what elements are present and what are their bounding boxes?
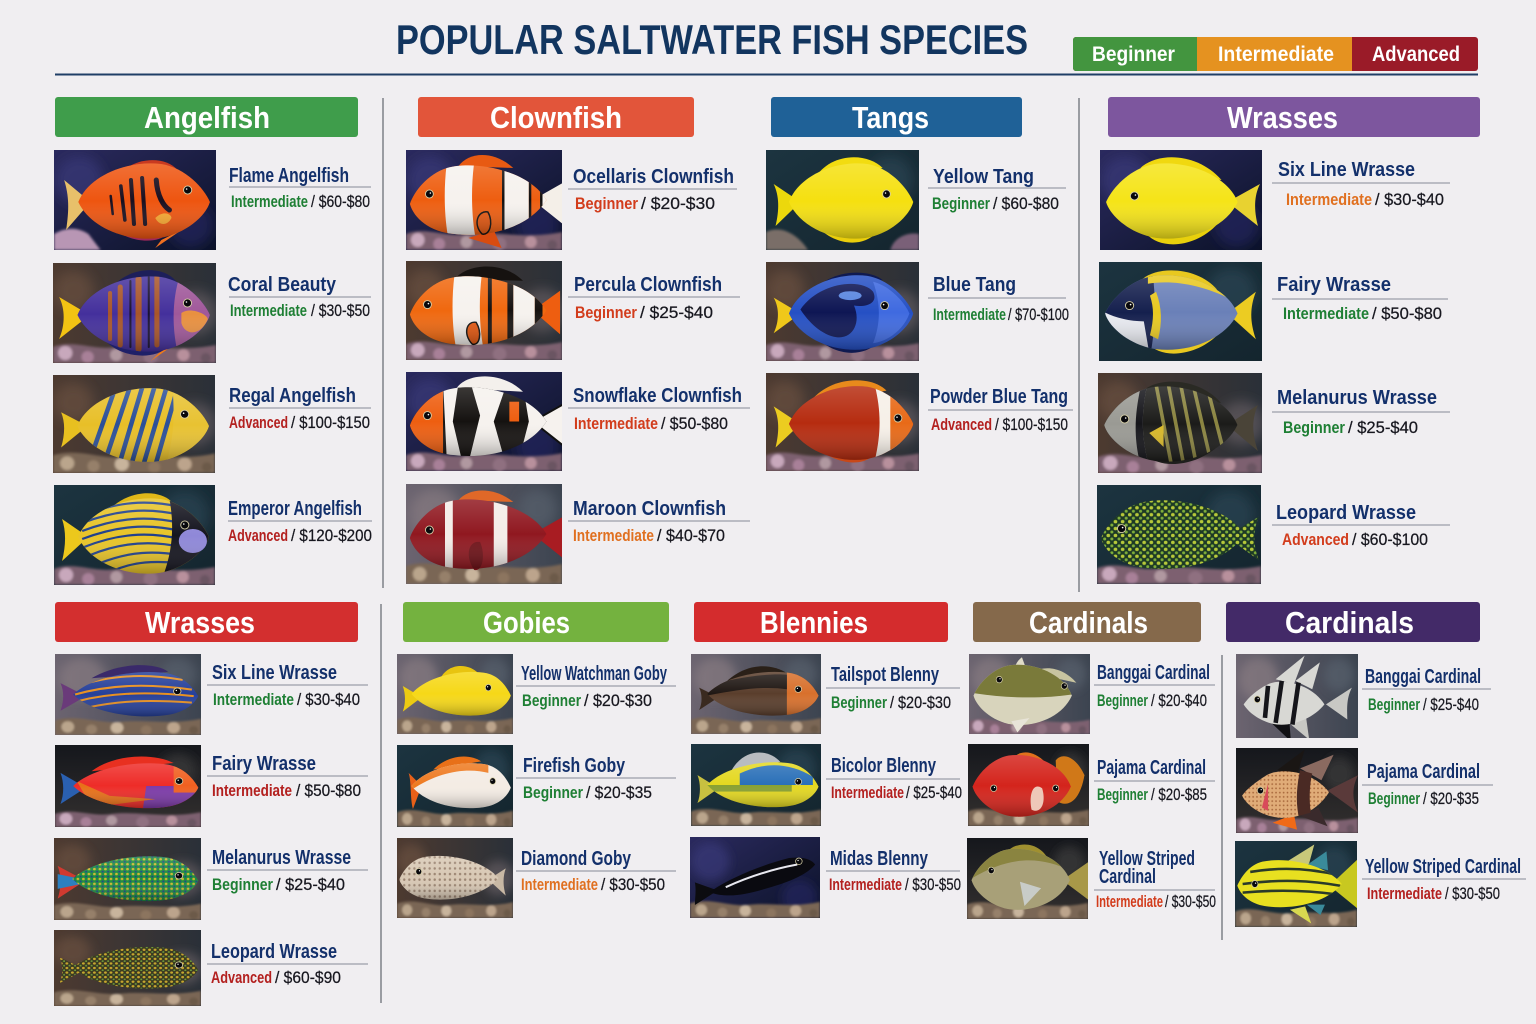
difficulty and price: / $20-$35 [1423, 789, 1479, 808]
title: POPULAR SALTWATER FISH SPECIES [396, 16, 1028, 63]
photo: Flame Angelfish [54, 150, 216, 250]
photo: Fairy Wrasse [55, 745, 201, 827]
difficulty and price: Advanced [931, 415, 992, 434]
name: Maroon Clownfish [573, 498, 726, 520]
difficulty and price: / $60-$80 [993, 194, 1059, 213]
photo: Six Line Wrasse [55, 654, 201, 735]
difficulty and price: / $70-$100 [1008, 305, 1069, 324]
difficulty and price: Beginner [522, 691, 581, 710]
difficulty and price: / $25-$40 [1348, 418, 1418, 437]
photo: Percula Clownfish [406, 261, 562, 360]
photo: Midas Blenny [690, 837, 820, 918]
legend: difficulty levels: Intermediate [1218, 43, 1334, 66]
difficulty and price: / $100-$150 [995, 415, 1068, 434]
heading: Blennies [694, 602, 948, 642]
heading: Tangs [771, 97, 1022, 137]
difficulty and price: Beginner [831, 693, 887, 712]
difficulty and price: / $25-$40 [906, 783, 962, 802]
panel: Angelfish [53, 97, 372, 586]
name: Midas Blenny [830, 848, 929, 870]
name: Regal Angelfish [229, 385, 356, 407]
name: Six Line Wrasse [212, 662, 337, 684]
difficulty and price [213, 690, 360, 709]
photo: Firefish Goby [397, 745, 513, 827]
photo: Pajama Cardinal [968, 744, 1089, 826]
difficulty and price: / $30-$50 [905, 875, 961, 894]
name: Yellow Watchman Goby [521, 663, 668, 685]
card: Melanurus Wrasse [1098, 373, 1450, 474]
name: Flame Angelfish [229, 165, 349, 187]
photo: Melanurus Wrasse [1098, 373, 1262, 473]
difficulty and price [228, 526, 372, 545]
difficulty and price [522, 691, 652, 710]
heading: Clownfish: Clownfish [490, 100, 622, 135]
heading: Wrasses [55, 602, 358, 642]
card: Snowflake Clownfish [406, 372, 750, 472]
photo: Regal Angelfish [53, 375, 215, 473]
photo: Coral Beauty [53, 263, 216, 363]
panel: Blennies [690, 602, 962, 918]
name: Six Line Wrasse [1278, 159, 1415, 181]
name: Firefish Goby [523, 755, 626, 777]
difficulty and price [211, 968, 341, 987]
difficulty and price: Beginner [1097, 785, 1148, 804]
panel: Tangs [766, 97, 1073, 472]
difficulty and price: / $120-$200 [291, 526, 372, 545]
difficulty and price: / $60-$90 [275, 968, 341, 987]
difficulty and price [1283, 418, 1418, 437]
photo: Maroon Clownfish [406, 484, 562, 584]
name: Yellow Striped [1099, 848, 1195, 870]
difficulty and price [523, 783, 652, 802]
difficulty and price: Beginner [523, 783, 583, 802]
card: Banggai Cardinal [1236, 654, 1491, 741]
difficulty and price [573, 526, 725, 545]
name: Emperor Angelfish [228, 498, 362, 520]
photo: Yellow Striped Cardinal [967, 838, 1088, 919]
difficulty and price: Advanced [229, 413, 288, 432]
photo: Snowflake Clownfish [406, 372, 562, 471]
name: Snowflake Clownfish [573, 385, 742, 407]
card: Blue Tang [766, 262, 1069, 362]
difficulty and price: Beginner [212, 875, 273, 894]
heading: Gobies [403, 602, 669, 642]
name: Diamond Goby [521, 848, 632, 870]
difficulty and price: / $20-$30 [584, 691, 652, 710]
heading: Wrasses: Wrasses [1227, 100, 1338, 135]
heading: Cardinals: Cardinals [1285, 605, 1414, 640]
card: Six Line Wrasse [55, 654, 368, 735]
difficulty and price [831, 693, 951, 712]
difficulty and price: Beginner [1097, 691, 1148, 710]
difficulty and price [212, 781, 361, 800]
difficulty and price: / $50-$80 [1372, 304, 1442, 323]
name: Fairy Wrasse [1277, 274, 1391, 296]
difficulty and price: Intermediate [574, 414, 658, 433]
difficulty and price: Intermediate [212, 781, 292, 800]
difficulty and price: Intermediate [521, 875, 598, 894]
difficulty and price: Intermediate [933, 305, 1006, 324]
photo: Ocellaris Clownfish [406, 150, 562, 250]
card: Yellow Striped Cardinal [1235, 841, 1526, 927]
photo: Pajama Cardinal [1236, 748, 1358, 833]
card: Midas Blenny [690, 837, 961, 918]
heading: Angelfish: Angelfish [144, 100, 270, 135]
card: Yellow Watchman Goby [397, 654, 676, 734]
card: Coral Beauty [53, 263, 371, 364]
photo: Fairy Wrasse [1099, 262, 1262, 361]
card: Fairy Wrasse [1099, 262, 1448, 361]
heading: Cardinals [973, 602, 1201, 642]
difficulty and price: Intermediate [1283, 304, 1369, 323]
card: Six Line Wrasse [1100, 150, 1450, 250]
heading: Tangs: Tangs [852, 100, 929, 135]
difficulty and price: / $25-$40 [276, 875, 345, 894]
difficulty and price [212, 875, 345, 894]
card: Firefish Goby [397, 745, 676, 827]
difficulty and price: / $60-$80 [311, 192, 370, 211]
heading: Angelfish [55, 97, 358, 137]
photo: Leopard Wrasse [1097, 485, 1261, 584]
difficulty and price [575, 303, 713, 322]
card: Yellow Tang [766, 150, 1066, 250]
card: Pajama Cardinal [968, 744, 1215, 826]
card: Diamond Goby [397, 838, 676, 918]
panel: Cardinals (brown) [967, 602, 1216, 919]
difficulty and price [1097, 691, 1207, 710]
name: Leopard Wrasse [211, 941, 337, 963]
name: Percula Clownfish [574, 274, 722, 296]
heading: Wrasses: Wrasses [145, 605, 255, 640]
card: Tailspot Blenny [691, 654, 960, 734]
difficulty and price [932, 194, 1059, 213]
legend: difficulty levels: Beginner [1092, 43, 1175, 66]
difficulty and price: Intermediate [1286, 190, 1372, 209]
name: Pajama Cardinal [1367, 761, 1480, 783]
difficulty and price: Advanced [211, 968, 272, 987]
photo: Banggai Cardinal [1236, 654, 1358, 738]
difficulty and price [575, 194, 715, 213]
difficulty and price [1282, 530, 1428, 549]
photo: Six Line Wrasse [1100, 150, 1262, 250]
card: Regal Angelfish [53, 375, 371, 473]
name: Pajama Cardinal [1097, 757, 1206, 779]
legend: difficulty levels: Advanced [1372, 43, 1460, 66]
photo: Melanurus Wrasse [54, 838, 201, 920]
difficulty and price: / $20-$40 [1151, 691, 1207, 710]
difficulty and price: / $30-$40 [297, 690, 360, 709]
difficulty and price: / $20-$85 [1151, 785, 1207, 804]
panel: Clownfish [406, 97, 750, 584]
difficulty and price: Beginner [1283, 418, 1345, 437]
difficulty and price: / $20-$30 [890, 693, 951, 712]
heading: Cardinals [1226, 602, 1480, 642]
difficulty and price: / $50-$80 [296, 781, 361, 800]
panel: Wrasses (top row) [1097, 97, 1480, 585]
difficulty and price [1368, 789, 1479, 808]
difficulty and price: Beginner [575, 303, 637, 322]
difficulty and price: / $60-$100 [1352, 530, 1428, 549]
heading: Blennies: Blennies [760, 605, 868, 640]
difficulty and price [574, 414, 728, 433]
panel: Cardinals (purple) [1226, 602, 1526, 927]
card: Pajama Cardinal [1236, 748, 1493, 834]
card: Maroon Clownfish [406, 484, 750, 584]
difficulty and price: / $100-$150 [291, 413, 370, 432]
difficulty and price [1283, 304, 1442, 323]
difficulty and price: Intermediate [1096, 892, 1163, 911]
heading: Gobies: Gobies [483, 605, 570, 640]
legend: difficulty levels [1073, 37, 1478, 71]
photo: Powder Blue Tang [766, 373, 919, 471]
difficulty and price: Beginner [1368, 789, 1420, 808]
name: Banggai Cardinal [1097, 662, 1210, 684]
name: Bicolor Blenny [831, 755, 937, 777]
photo: Emperor Angelfish [54, 485, 215, 585]
difficulty and price: Intermediate [831, 783, 904, 802]
photo: Tailspot Blenny [691, 654, 821, 734]
card: Powder Blue Tang [766, 373, 1073, 472]
difficulty and price [931, 415, 1068, 434]
difficulty and price: Beginner [1368, 695, 1420, 714]
card: Flame Angelfish [54, 150, 371, 250]
name [1099, 848, 1195, 888]
name: Blue Tang [933, 274, 1016, 296]
heading: Clownfish [418, 97, 694, 137]
difficulty and price: Beginner [575, 194, 638, 213]
difficulty and price: Beginner [932, 194, 990, 213]
heading: Cardinals: Cardinals [1029, 605, 1148, 640]
difficulty and price: Advanced [228, 526, 288, 545]
difficulty and price: Advanced [1282, 530, 1349, 549]
card: Bicolor Blenny [691, 744, 962, 826]
difficulty and price [1286, 190, 1444, 209]
card: Emperor Angelfish [54, 485, 372, 586]
name: Melanurus Wrasse [1277, 387, 1437, 409]
name: Ocellaris Clownfish [573, 166, 734, 188]
difficulty and price: Intermediate [230, 301, 307, 320]
card: Banggai Cardinal [969, 654, 1215, 735]
difficulty and price: / $30-$50 [601, 875, 665, 894]
photo: Yellow Striped Cardinal [1235, 841, 1357, 927]
difficulty and price: / $20-$30 [641, 194, 715, 213]
photo: Diamond Goby [397, 838, 513, 918]
heading: Wrasses [1108, 97, 1480, 137]
card: Ocellaris Clownfish [406, 150, 737, 251]
photo: Yellow Watchman Goby [397, 654, 513, 734]
name: Yellow Tang [933, 166, 1034, 188]
name: Cardinal [1099, 866, 1156, 888]
difficulty and price: Intermediate [829, 875, 902, 894]
photo: Bicolor Blenny [691, 744, 821, 826]
photo: Banggai Cardinal [969, 654, 1090, 734]
difficulty and price: / $50-$80 [661, 414, 728, 433]
name: Banggai Cardinal [1365, 666, 1481, 688]
card: Melanurus Wrasse [54, 838, 368, 920]
card: Percula Clownfish [406, 261, 740, 361]
difficulty and price: / $20-$35 [586, 783, 652, 802]
difficulty and price [1368, 695, 1479, 714]
difficulty and price: / $30-$50 [311, 301, 370, 320]
difficulty and price: Intermediate [573, 526, 654, 545]
photo: Leopard Wrasse [54, 930, 201, 1006]
name: Tailspot Blenny [831, 664, 940, 686]
panel: Gobies [397, 602, 676, 918]
photo: Yellow Tang [766, 150, 919, 250]
difficulty and price: / $25-$40 [640, 303, 713, 322]
name: Coral Beauty [228, 274, 337, 296]
name: Fairy Wrasse [212, 753, 316, 775]
difficulty and price: / $30-$50 [1445, 884, 1500, 903]
difficulty and price: / $40-$70 [657, 526, 725, 545]
difficulty and price [229, 413, 370, 432]
card: Leopard Wrasse [1097, 485, 1450, 585]
name: Leopard Wrasse [1276, 502, 1416, 524]
difficulty and price: Intermediate [231, 192, 308, 211]
card: Fairy Wrasse [55, 745, 368, 828]
card: Yellow Striped Cardinal [967, 838, 1216, 919]
photo: Blue Tang [766, 262, 919, 361]
name: Melanurus Wrasse [212, 847, 351, 869]
difficulty and price: / $30-$50 [1165, 892, 1216, 911]
difficulty and price: Intermediate [1367, 884, 1442, 903]
difficulty and price [1097, 785, 1207, 804]
panel: Wrasses (bottom row) [54, 602, 368, 1006]
card: Leopard Wrasse [54, 930, 368, 1006]
difficulty and price: / $25-$40 [1423, 695, 1479, 714]
name: Powder Blue Tang [930, 386, 1068, 408]
difficulty and price: / $30-$40 [1375, 190, 1444, 209]
difficulty and price: Intermediate [213, 690, 294, 709]
